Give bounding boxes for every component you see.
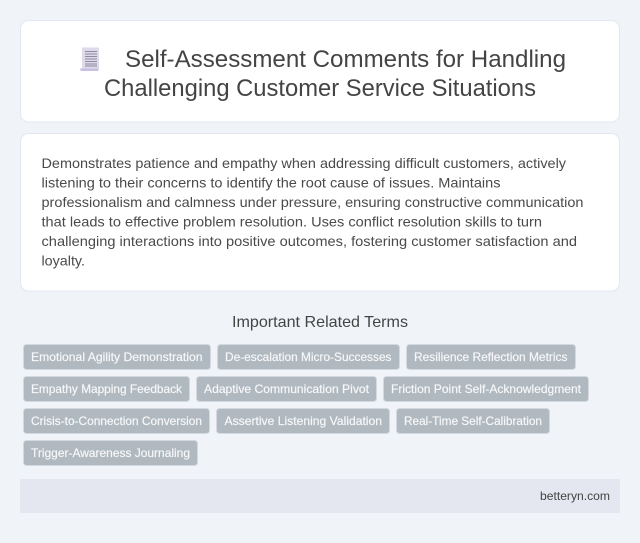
panel: summary card — [20, 134, 620, 291]
chip: Real-Time Self-Calibration — [396, 408, 550, 434]
chip: Assertive Listening Validation: Assertive Listening Validation — [224, 414, 382, 428]
chip: Real-Time Self-Calibration: Real-Time Self-Calibration — [404, 414, 542, 428]
chip: Emotional Agility Demonstration — [24, 344, 210, 370]
summary paragraph: that leads to effective problem resolution. Uses conflict resolution skills to turn — [42, 214, 542, 230]
panel: title card — [20, 20, 620, 122]
summary paragraph: Demonstrates patience and empathy when addressing difficult customers, actively — [42, 155, 566, 171]
chip: De-escalation Micro-Successes: De-escalation Micro-Successes — [225, 350, 392, 364]
chip: De-escalation Micro-Successes — [218, 344, 400, 370]
chip: Resilience Reflection Metrics: Resilience Reflection Metrics — [414, 350, 568, 364]
summary paragraph: professionalism and calmness under pressure, ensuring constructive communication — [42, 194, 584, 210]
chip: Crisis-to-Connection Conversion — [24, 408, 210, 434]
title text: Self-Assessment Comments for Handling — [125, 46, 566, 73]
summary paragraph: challenging interactions into positive outcomes, fostering customer satisfaction and — [42, 233, 577, 249]
footer source text: betteryn.com — [540, 489, 610, 503]
chip: Adaptive Communication Pivot — [196, 376, 376, 402]
chip: Adaptive Communication Pivot: Adaptive Communication Pivot — [204, 382, 370, 396]
chip: Empathy Mapping Feedback — [24, 376, 190, 402]
summary paragraph — [42, 155, 584, 268]
chip: Assertive Listening Validation — [216, 408, 390, 434]
chip: Trigger-Awareness Journaling — [24, 440, 198, 466]
summary paragraph: listening to their concerns to identify the root cause of issues. Maintains — [42, 174, 500, 190]
title text: Challenging Customer Service Situations — [104, 75, 536, 102]
icon: document scroll — [80, 48, 99, 71]
heading: related terms: Important Related Terms — [232, 314, 408, 331]
panel: term chips — [24, 344, 588, 466]
chip: Resilience Reflection Metrics — [406, 344, 576, 370]
chip: Trigger-Awareness Journaling: Trigger-Awareness Journaling — [31, 446, 190, 460]
chip: Friction Point Self-Acknowledgment: Friction Point Self-Acknowledgment — [391, 382, 582, 396]
footer bar — [20, 479, 620, 513]
title text — [104, 46, 566, 102]
chip: Empathy Mapping Feedback: Empathy Mapping Feedback — [31, 382, 183, 396]
chip: Crisis-to-Connection Conversion: Crisis-to-Connection Conversion — [31, 414, 202, 428]
chip: Emotional Agility Demonstration: Emotional Agility Demonstration — [31, 350, 202, 364]
summary paragraph: loyalty. — [42, 252, 85, 268]
chip: Friction Point Self-Acknowledgment — [384, 376, 588, 402]
